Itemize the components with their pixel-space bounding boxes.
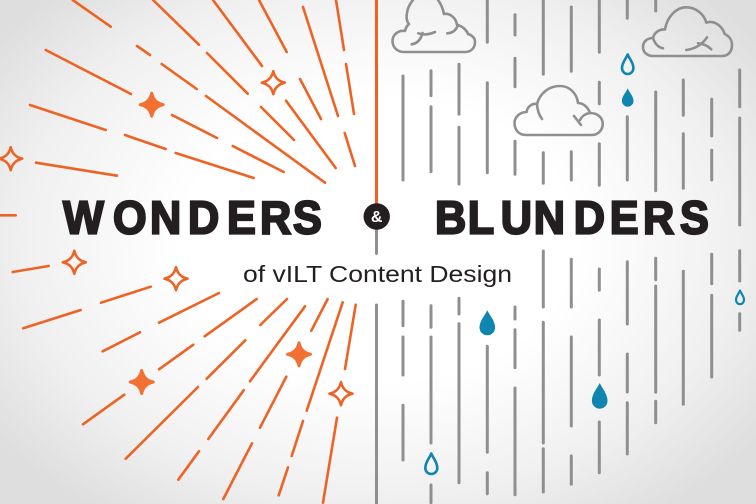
cloud top right: [643, 7, 732, 56]
title: blunders: BLUNDERS: [435, 191, 709, 244]
outline star left: [63, 251, 86, 274]
grey rain lines: [403, 0, 740, 503]
cloud centre: [514, 86, 603, 135]
right panel: blunders rain: [392, 0, 744, 503]
filled star lower right: [288, 343, 310, 366]
centre divider: [364, 0, 390, 504]
outline drop right edge: [736, 290, 744, 304]
filled drop large right: [592, 383, 608, 409]
outline star top right: [262, 71, 285, 94]
filled star top: [140, 93, 163, 116]
outline drop bottom: [425, 454, 437, 474]
filled drop top: [622, 88, 634, 107]
ampersand badge: [364, 203, 390, 230]
subtitle: of vILT Content Design: [243, 261, 512, 287]
outline star centre: [164, 267, 188, 290]
title: wonders: WONDERS: [63, 191, 322, 244]
filled drop large left: [480, 310, 495, 335]
filled star lower left: [130, 370, 153, 394]
grey divider line: [375, 226, 378, 504]
outline star left edge: [0, 147, 22, 170]
left panel: wonders sunburst: [0, 0, 356, 503]
outline star bottom: [330, 382, 352, 405]
outline drop top: [622, 54, 633, 74]
orange rays: [0, 0, 356, 503]
ampersand badge: &: [371, 209, 383, 226]
orange divider line: [375, 0, 378, 205]
cloud top left: [392, 0, 475, 52]
